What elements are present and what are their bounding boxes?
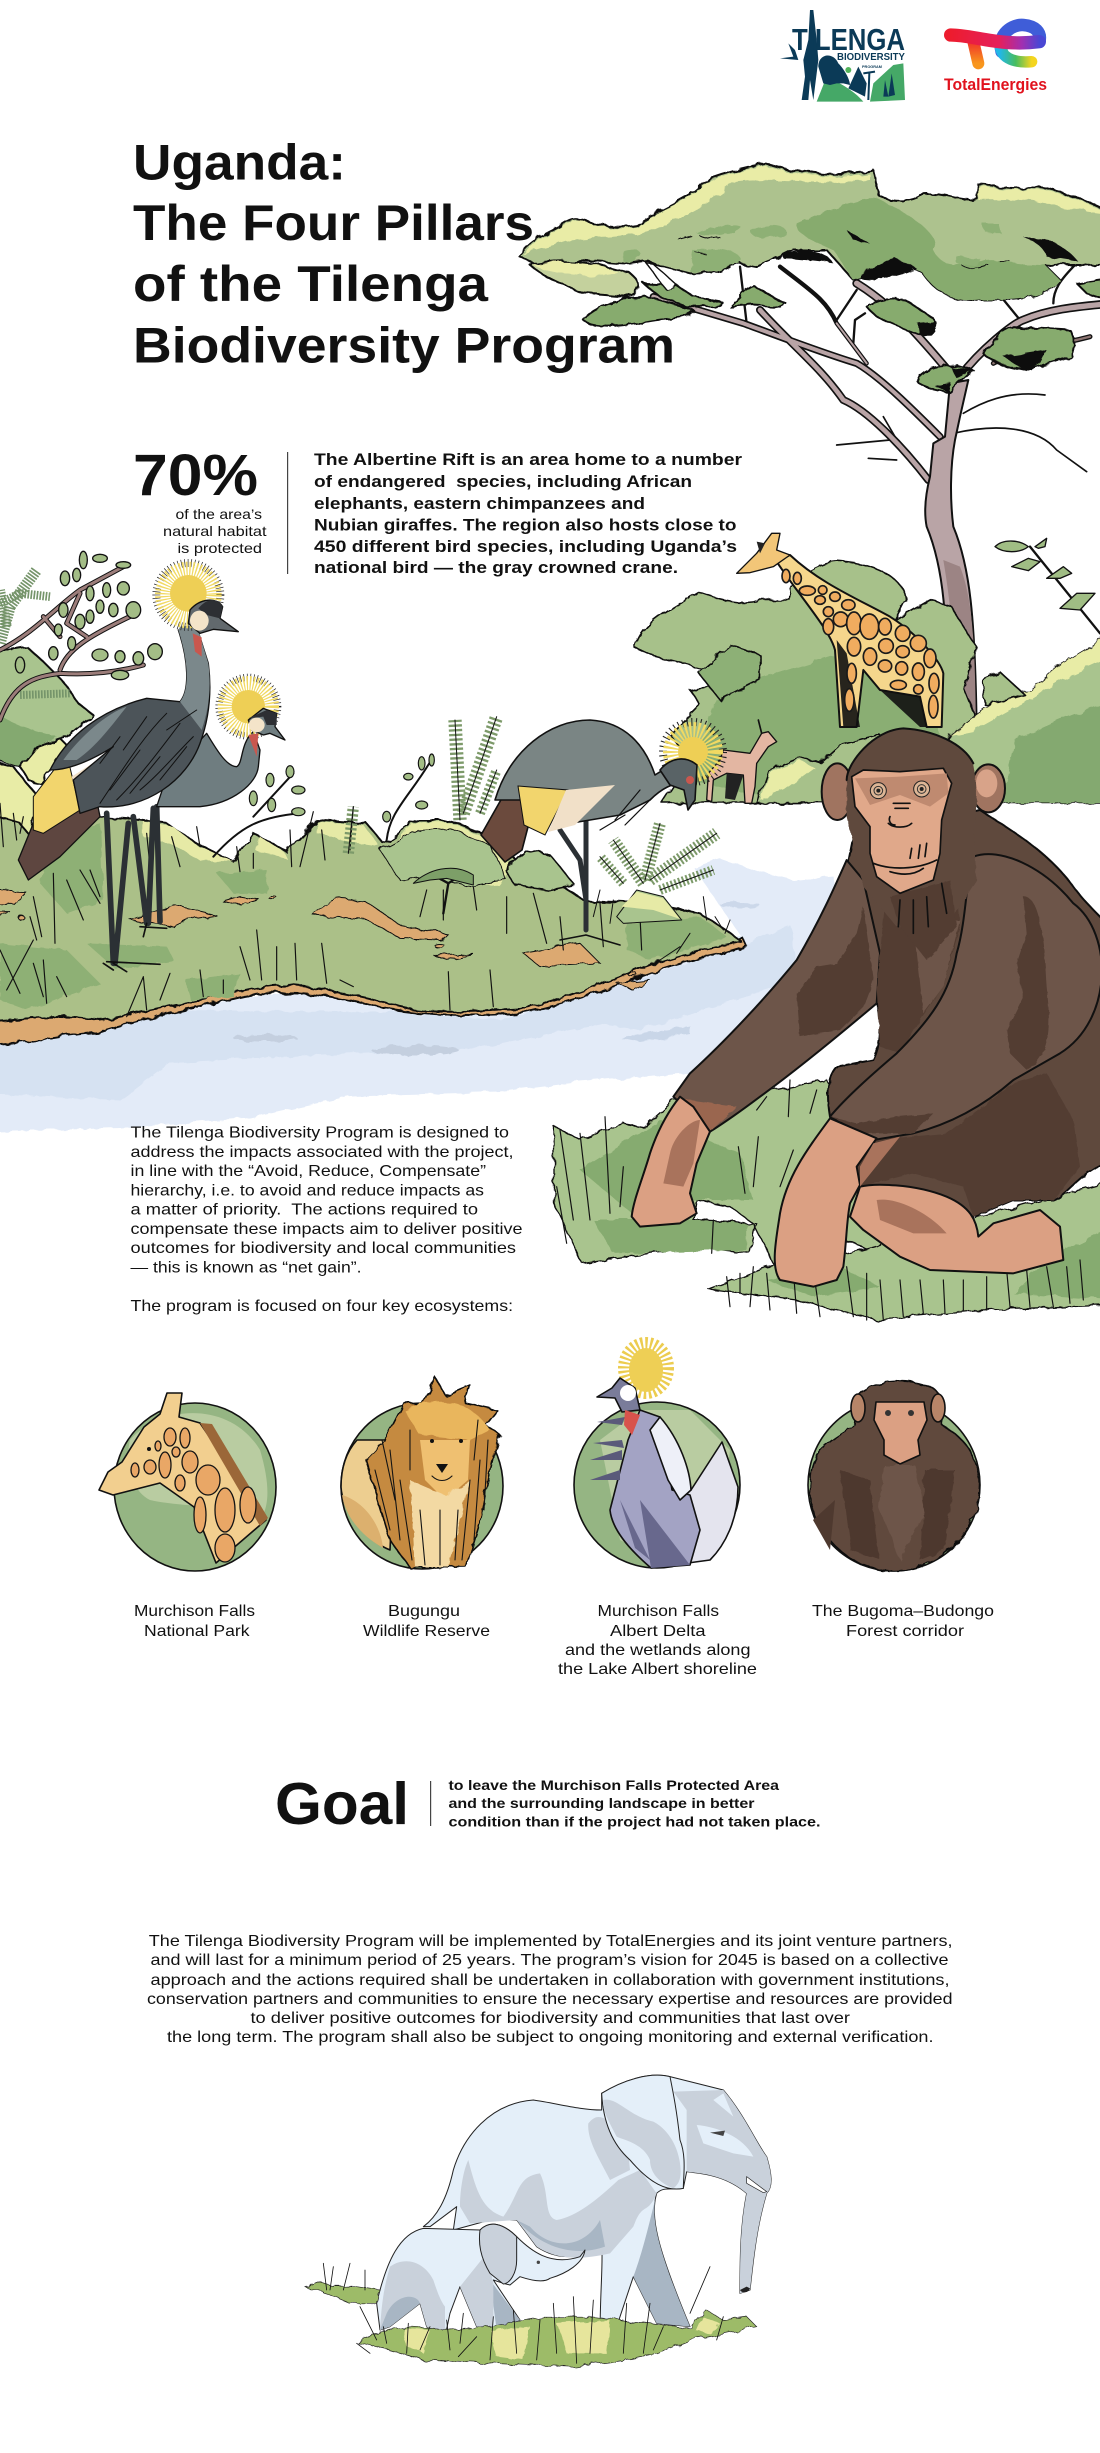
text block: program description: hierarchy, i.e. to avoid and reduce impacts as xyxy=(130,1182,484,1200)
logo mark silhouettes xyxy=(780,10,905,102)
caption: Bugungu Wildlife Reserve xyxy=(363,1603,490,1640)
illustration: right bushes xyxy=(635,562,1100,803)
text block: Albertine Rift: elephants, eastern chimpanzees and xyxy=(314,494,645,513)
illustration: giraffe medallion xyxy=(99,1393,276,1571)
goal xyxy=(275,1771,820,1837)
illustration: crane medallion xyxy=(574,1346,740,1568)
caption: Murchison Falls National Park: National Park xyxy=(144,1623,251,1640)
chimpanzee ears xyxy=(822,763,1005,820)
chimpanzee head xyxy=(847,728,977,960)
text block: program description: — this is known as “net gain”. xyxy=(130,1260,362,1276)
text block: implementation: approach and the actions required shall be undertaken in collaboration with government institutions, xyxy=(150,1972,950,1989)
logo: TotalEnergies xyxy=(944,25,1047,94)
logo: Tilenga Biodiversity Program: BIODIVERSITY xyxy=(837,52,905,63)
crane one xyxy=(18,563,238,972)
chimpanzee leg and foot xyxy=(775,1118,877,1287)
text block: Albertine Rift: 450 different bird species, including Uganda’s xyxy=(314,537,737,556)
grass highlights xyxy=(143,822,513,887)
caption: Bugoma-Budongo Forest corridor xyxy=(812,1603,994,1640)
text block: Albertine Rift: Nubian giraffes. The region also hosts close to xyxy=(314,516,736,534)
text block: program description: The Tilenga Biodiversity Program is designed to xyxy=(130,1124,509,1142)
sandy shoreline xyxy=(0,938,747,1045)
island small tree xyxy=(413,868,473,913)
illustration: left tree and bush xyxy=(0,551,162,837)
text block: implementation: and will last for a minimum period of 25 years. The program’s vision for 2045 is based on a collective xyxy=(150,1952,949,1969)
text block: Albertine Rift: of endangered species, including African xyxy=(314,472,692,491)
text block: implementation: The Tilenga Biodiversity Program will be implemented by TotalEnergies and its joint venture partners, xyxy=(149,1933,953,1950)
stat: 70 percent protected xyxy=(133,443,288,574)
text block: program description: outcomes for biodiversity and local communities xyxy=(130,1240,516,1257)
title: Uganda: xyxy=(133,134,346,190)
giraffe spots xyxy=(782,569,939,718)
canopy side lobes xyxy=(530,261,638,297)
text block: program description: in line with the “Avoid, Reduce, Compensate” xyxy=(130,1163,486,1180)
chimpanzee body xyxy=(828,810,1100,1217)
chimpanzee lower belly shade xyxy=(857,1073,1080,1217)
illustration: island bush and crane three xyxy=(481,720,723,945)
title xyxy=(133,134,675,374)
tree trunk xyxy=(925,380,977,727)
caption: Murchison Falls National Park: Murchison Falls xyxy=(134,1603,255,1620)
tree canopy xyxy=(519,163,1100,392)
goal: and the surrounding landscape in better xyxy=(448,1795,755,1811)
caption: Bugungu Wildlife Reserve: Bugungu xyxy=(388,1603,460,1620)
illustration: chimpanzee xyxy=(554,728,1100,1320)
chimpanzee left arm xyxy=(673,860,880,1132)
chimpanzee face xyxy=(852,768,952,933)
logo: Tilenga Biodiversity Program: TILENGA xyxy=(792,22,905,57)
baby elephant xyxy=(377,2224,585,2337)
caption: Murchison Falls Albert Delta: Murchison Falls xyxy=(598,1603,719,1620)
caption: Bugungu Wildlife Reserve: Wildlife Reserve xyxy=(363,1623,490,1640)
caption: Murchison Falls Albert Delta: the Lake Albert shoreline xyxy=(558,1661,757,1678)
text block: program description: address the impacts associated with the project, xyxy=(130,1144,514,1161)
text block: implementation: to deliver positive outcomes for biodiversity and communities that last over xyxy=(250,2010,851,2027)
text block: program description: The program is focused on four key ecosystems: xyxy=(130,1298,513,1315)
adult elephant xyxy=(423,2075,771,2337)
caption: Murchison Falls Albert Delta: Albert Delta xyxy=(610,1623,706,1640)
grass patch under chimpanzee xyxy=(554,1080,1100,1320)
illustration: two crowned cranes xyxy=(18,563,285,972)
goal: to leave the Murchison Falls Protected Area xyxy=(448,1777,779,1793)
stat: 70 percent protected: 70% xyxy=(133,443,258,508)
stat: 70 percent protected: natural habitat xyxy=(163,523,267,539)
text block: implementation xyxy=(147,1933,952,2046)
grass under elephants xyxy=(305,2263,757,2367)
illustration: lion medallion xyxy=(341,1377,503,1569)
grass tufts xyxy=(0,803,642,1017)
caption: Bugoma-Budongo Forest corridor: Forest corridor xyxy=(846,1623,965,1640)
chimpanzee hand xyxy=(632,1097,710,1227)
title: of the Tilenga xyxy=(133,256,489,312)
goal: condition than if the project had not taken place. xyxy=(448,1814,820,1830)
mud patches xyxy=(0,890,650,990)
title: The Four Pillars xyxy=(133,195,534,251)
text block: implementation: the long term. The program shall also be subject to ongoing monitoring and external verification. xyxy=(167,2029,934,2046)
stat: 70 percent protected: of the area’s xyxy=(176,506,262,522)
illustration: chimpanzee medallion xyxy=(808,1381,980,1571)
left tree leaves xyxy=(15,551,162,680)
caption: Murchison Falls Albert Delta: and the wetlands along xyxy=(565,1642,750,1659)
text block: program description xyxy=(130,1124,523,1315)
title: Biodiversity Program xyxy=(133,318,675,374)
text block: Albertine Rift: national bird — the gray crowned crane. xyxy=(314,558,678,577)
island grass xyxy=(0,813,742,1022)
illustration: shore plants xyxy=(213,717,497,857)
illustration: river water xyxy=(0,858,860,1132)
illustration: reeds by crane xyxy=(593,823,730,960)
caption: Murchison Falls Albert Delta xyxy=(558,1603,757,1678)
left tree branches xyxy=(0,567,143,720)
illustration: elephants xyxy=(305,2075,771,2367)
caption: Bugoma-Budongo Forest corridor: The Bugoma–Budongo xyxy=(812,1603,994,1620)
caption: Murchison Falls National Park xyxy=(134,1603,255,1640)
left tree fronds xyxy=(0,570,70,695)
chimpanzee chest xyxy=(877,880,960,1053)
tree branches xyxy=(653,243,1100,480)
illustration: acacia tree xyxy=(519,163,1100,727)
logo: Tilenga Biodiversity Program xyxy=(780,10,905,102)
text block: implementation: conservation partners and communities to ensure the necessary expertise and resources are provided xyxy=(147,1991,952,2008)
logo: Tilenga Biodiversity Program: PROGRAM xyxy=(862,64,883,69)
chimpanzee right arm xyxy=(830,854,1100,1140)
text block: program description: compensate these impacts aim to deliver positive xyxy=(130,1221,523,1238)
illustration: gazelle xyxy=(707,720,777,803)
text block: Albertine Rift: The Albertine Rift is an area home to a number xyxy=(314,450,742,469)
text block: Albertine Rift xyxy=(314,450,742,577)
bush beside crane xyxy=(505,850,575,890)
illustration: right twig xyxy=(995,538,1100,633)
text block: program description: a matter of priority. The actions required to xyxy=(130,1202,478,1218)
illustration: scene giraffe xyxy=(737,533,943,727)
illustration: island with grass xyxy=(0,803,747,1045)
stat: 70 percent protected: is protected xyxy=(178,540,262,556)
logo: TotalEnergies: TotalEnergies xyxy=(944,75,1047,94)
crane two xyxy=(148,677,285,923)
reed fronds xyxy=(348,717,497,853)
goal: Goal xyxy=(275,1771,409,1837)
